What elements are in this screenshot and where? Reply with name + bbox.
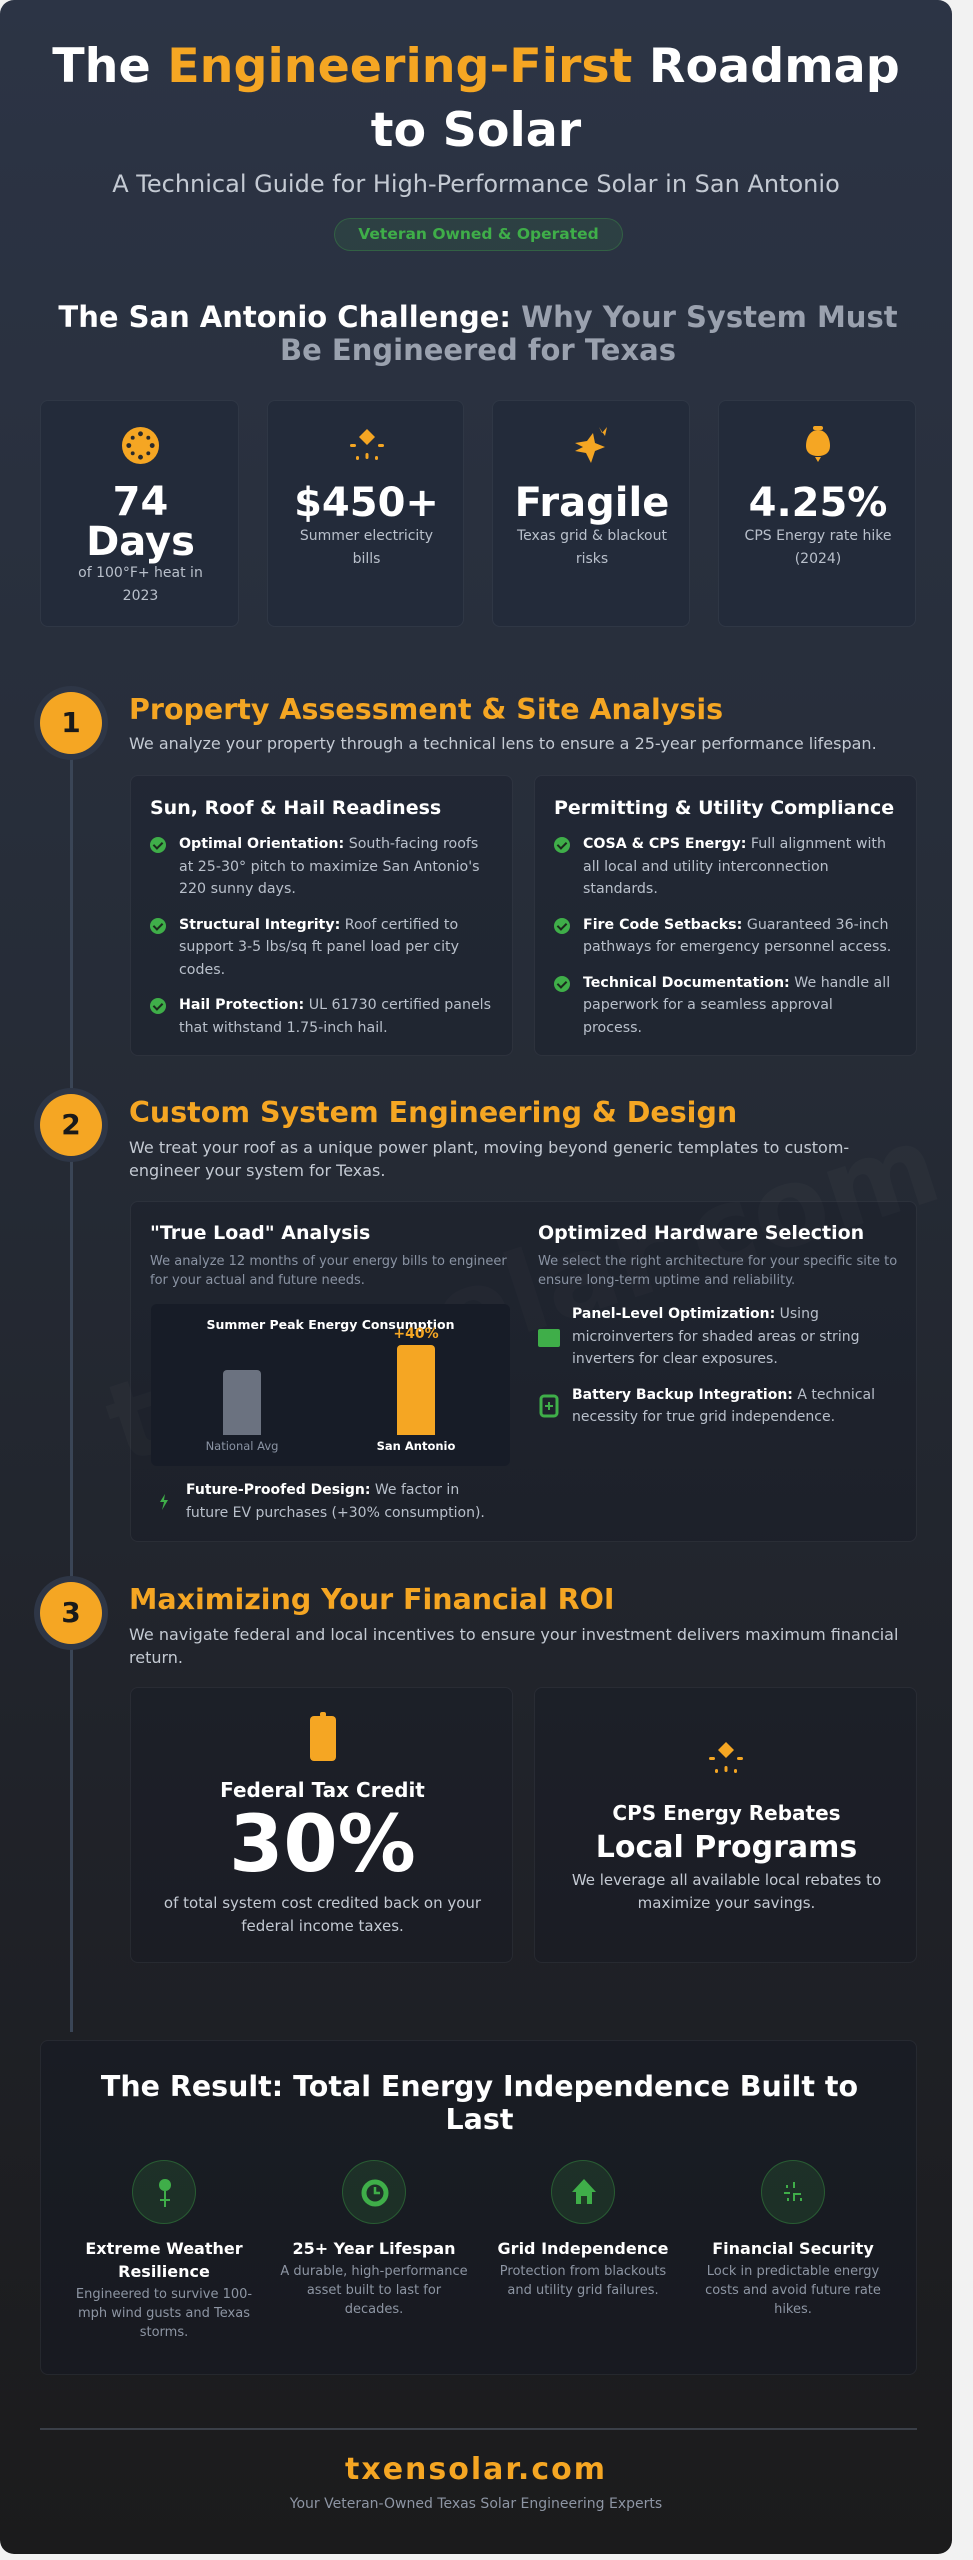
title: [52, 39, 900, 158]
hardware column: We select the right architecture for your specific site to ensure long-term uptime and reliability.: [538, 1254, 897, 1288]
result: grid: Protection from blackouts and utility grid failures.: [500, 2264, 666, 2298]
card: permitting: Permitting & Utility Compliance: [554, 797, 894, 819]
step 1 number: [34, 686, 108, 760]
step 2 heading: Custom System Engineering & Design: [129, 1096, 737, 1129]
stat card: bills: Summer electricity bills: [300, 528, 433, 567]
result: grid: Grid Independence: [498, 2239, 668, 2258]
result: financial: Lock in predictable energy costs and avoid future rate hikes.: [705, 2264, 881, 2317]
result: weather: Extreme Weather Resilience: [85, 2239, 243, 2281]
step 1: [34, 686, 877, 760]
bar chart: San Antonio: [377, 1439, 455, 1453]
step 2 number: 2: [61, 1108, 81, 1141]
stat card: heat days: of 100°F+ heat in 2023: [78, 565, 203, 604]
result: weather: Engineered to survive 100-mph wind gusts and Texas storms.: [76, 2287, 252, 2340]
stat card: grid: Fragile: [515, 480, 669, 526]
stat card: rate hike: 4.25%: [749, 480, 887, 526]
icon: spark: [709, 1742, 743, 1773]
stat card: rate hike: [718, 400, 916, 627]
icon: battery: [310, 1712, 336, 1761]
subtitle: A Technical Guide for High-Performance Solar in San Antonio: [112, 170, 840, 198]
card: sun roof hail: Hail Protection: UL 61730 certified panels that withstand 1.75-inch hail.: [179, 997, 491, 1036]
bar chart: Summer Peak Energy Consumption: [207, 1317, 454, 1332]
result: lifespan: [280, 2160, 468, 2317]
card: sun roof hail: Optimal Orientation: South-facing roofs at 25-30° pitch to maximize San Antonio's 220 sunny days.: [179, 836, 480, 897]
stat card: bills: $450+: [294, 480, 439, 526]
hardware column: Optimized Hardware Selection: [538, 1222, 864, 1244]
stat card: heat days: [40, 400, 239, 627]
card: engineering: [130, 1201, 917, 1542]
card: sun roof hail: Structural Integrity: Roof certified to support 3-5 lbs/sq ft panel load per city codes.: [179, 916, 459, 978]
hardware column: [538, 1222, 897, 1425]
card: cps rebates: CPS Energy Rebates: [612, 1801, 841, 1825]
future-proofed: Future-Proofed Design: We factor in future EV purchases (+30% consumption).: [186, 1482, 485, 1520]
true load column: "True Load" Analysis: [150, 1222, 370, 1244]
result heading: The Result: Total Energy Independence Built to Last: [101, 2070, 858, 2136]
step 3 description: We navigate federal and local incentives to ensure your investment delivers maximum financial return.: [129, 1625, 898, 1667]
footer tagline: Your Veteran-Owned Texas Solar Engineering Experts: [290, 2496, 662, 2512]
timeline line: [70, 723, 73, 2032]
challenge heading: The San Antonio Challenge: Why Your System Must Be Engineered for Texas: [58, 300, 898, 367]
step 3 number: [34, 1576, 108, 1650]
footer brand: txensolar.com: [345, 2452, 607, 2487]
card: cps rebates: We leverage all available local rebates to maximize your savings.: [572, 1871, 881, 1912]
watermark: txensolar.com: [91, 1099, 952, 1489]
card: permitting: Fire Code Setbacks: Guaranteed 36-inch pathways for emergency personnel access.: [583, 916, 891, 955]
hardware column: Battery Backup Integration: A technical necessity for true grid independence.: [572, 1386, 875, 1425]
badge: [334, 218, 623, 251]
card: cps rebates: [534, 1687, 917, 1963]
stat card: heat days: 74: [113, 479, 168, 525]
icon: sun: [122, 427, 159, 464]
result: financial: Financial Security: [712, 2239, 874, 2258]
step 1 number: 1: [61, 706, 81, 739]
hardware column: Panel-Level Optimization: Using microinverters for shaded areas or string inverters for clear exposures.: [572, 1306, 859, 1367]
result panel: [40, 2040, 917, 2375]
stat card: rate hike: CPS Energy rate hike (2024): [745, 528, 891, 567]
bar chart: National Avg: [206, 1439, 278, 1453]
card: permitting: [534, 775, 917, 1056]
card: sun roof hail: Sun, Roof & Hail Readiness: [150, 797, 441, 819]
step 1 description: We analyze your property through a technical lens to ensure a 25-year performance lifespan.: [129, 734, 877, 753]
title: The Engineering-First Roadmap: [52, 39, 900, 94]
icon: bell: [806, 426, 830, 462]
step 3: [34, 1576, 898, 1667]
stat card: heat days: Days: [86, 519, 195, 565]
result: financial: [705, 2160, 881, 2317]
card: sun roof hail: [130, 775, 513, 1056]
card: federal tax credit: of total system cost credited back on your federal income taxes.: [164, 1894, 481, 1935]
icon: spark: [350, 429, 384, 460]
step 2 number: [34, 1088, 108, 1162]
step 3 heading: Maximizing Your Financial ROI: [129, 1583, 614, 1616]
step 2 description: We treat your roof as a unique power plant, moving beyond generic templates to custom-engineer your system for Texas.: [129, 1138, 849, 1180]
bar chart: +40%: [393, 1326, 439, 1342]
card: federal tax credit: [130, 1687, 513, 1963]
stat card: grid: Texas grid & blackout risks: [517, 528, 667, 567]
step 1 heading: Property Assessment & Site Analysis: [129, 693, 723, 726]
card: federal tax credit: 30%: [229, 1800, 416, 1890]
step 2: [34, 1088, 849, 1180]
card: permitting: COSA & CPS Energy: Full alignment with all local and utility interconnection standards.: [583, 836, 886, 897]
stat card: grid: [492, 400, 690, 627]
card: cps rebates: Local Programs: [596, 1830, 857, 1865]
bar chart: [151, 1304, 510, 1466]
badge: Veteran Owned & Operated: [358, 225, 599, 243]
result: lifespan: A durable, high-performance asset built to last for decades.: [280, 2264, 468, 2317]
icon: lightning break: [575, 427, 607, 463]
result: lifespan: 25+ Year Lifespan: [292, 2239, 456, 2258]
result: grid: [498, 2160, 668, 2298]
card: permitting: Technical Documentation: We handle all paperwork for a seamless approval process.: [583, 974, 890, 1036]
true load column: [150, 1222, 507, 1288]
stat card: bills: [267, 400, 464, 627]
card: federal tax credit: Federal Tax Credit: [220, 1778, 425, 1802]
title: to Solar: [371, 103, 581, 158]
step 3 number: 3: [61, 1596, 81, 1629]
result: weather: [76, 2160, 252, 2340]
true load column: We analyze 12 months of your energy bills to engineer for your actual and future needs.: [150, 1254, 507, 1288]
